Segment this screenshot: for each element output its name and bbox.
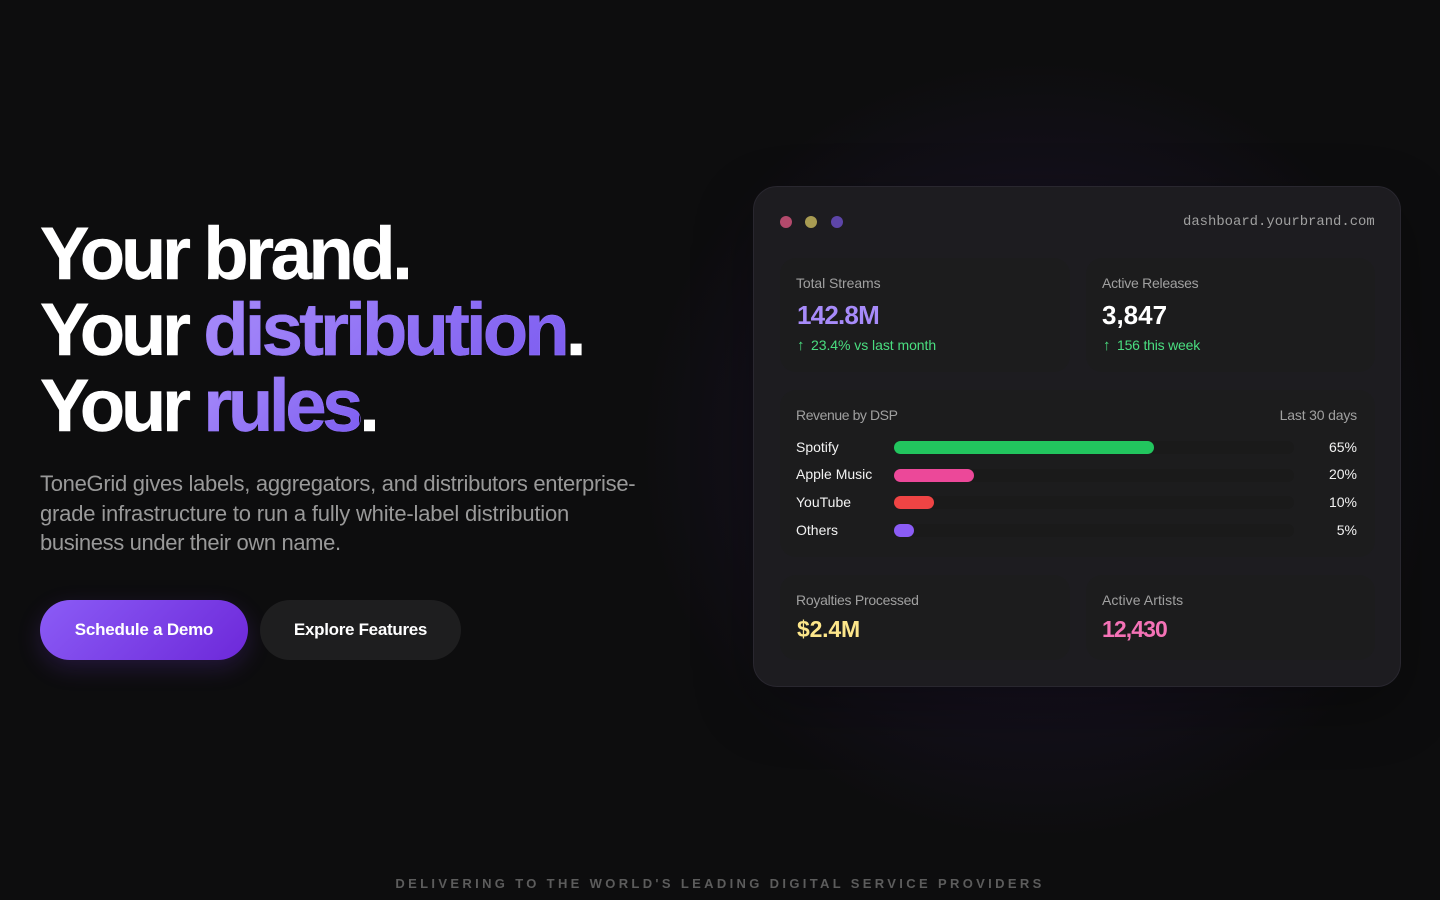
bar row: spotify: Spotify [796,439,839,455]
window dot: purple [831,216,843,228]
bar row: others: Others [796,522,838,538]
subheading paragraph: ToneGrid gives labels, aggregators, and distributors enterprise- [40,471,635,496]
window dot: red [780,216,792,228]
footer tagline: DELIVERING TO THE WORLD'S LEADING DIGITAL SERVICE PROVIDERS [395,876,1045,891]
stat: total streams: 142.8M [797,300,879,330]
panel: dashboard card [753,186,1401,687]
chart title: Revenue by DSP [796,407,898,423]
bar row: youtube [796,494,1357,510]
background glow [640,60,1440,840]
chart: revenue by dsp [780,390,1375,557]
stat: active releases: ↑ [1103,337,1110,354]
bar row: apple music: Apple Music [796,466,872,482]
subheading paragraph [40,471,635,555]
stat: total streams [780,258,1070,372]
stat: active artists: Active Artists [1102,592,1183,608]
bar row: apple music [796,466,1357,482]
window dot: yellow [805,216,817,228]
bar row: others [796,522,1357,538]
stat: royalties processed: $2.4M [797,616,860,642]
button: explore features [260,600,461,660]
heading: Your brand. [40,212,409,295]
button: schedule a demo [40,600,248,660]
button: schedule a demo: Schedule a Demo [75,620,213,639]
bar row: youtube: YouTube [796,494,851,510]
stat: active releases: Active Releases [1102,275,1198,291]
stat: active artists: 12,430 [1102,616,1167,642]
subheading paragraph: grade infrastructure to run a fully white-label distribution [40,500,569,526]
bar row: spotify [796,439,1357,455]
stat: royalties processed [780,575,1070,660]
heading: Your rules. [40,364,376,447]
stat: total streams: ↑ [797,337,804,354]
button: explore features: Explore Features [294,620,427,639]
bar row: apple music: 20% [1329,466,1357,482]
stat: royalties processed: Royalties Processed [796,592,919,608]
stat: active releases: 156 this week [1117,337,1200,353]
stat: total streams: Total Streams [796,275,881,291]
bar row: others: 5% [1337,522,1357,538]
stat: active releases: 3,847 [1102,300,1167,330]
bar row: youtube: 10% [1329,494,1357,510]
subheading paragraph: business under their own name. [40,530,341,555]
chart period: Last 30 days [1280,407,1357,423]
heading [40,212,583,447]
bar row: spotify: 65% [1329,439,1357,455]
heading: Your distribution. [40,288,583,371]
stat: active artists [1086,575,1375,660]
dashboard url: dashboard.yourbrand.com [1183,214,1375,230]
stat: total streams: 23.4% vs last month [811,337,936,353]
stat: active releases [1086,258,1375,372]
